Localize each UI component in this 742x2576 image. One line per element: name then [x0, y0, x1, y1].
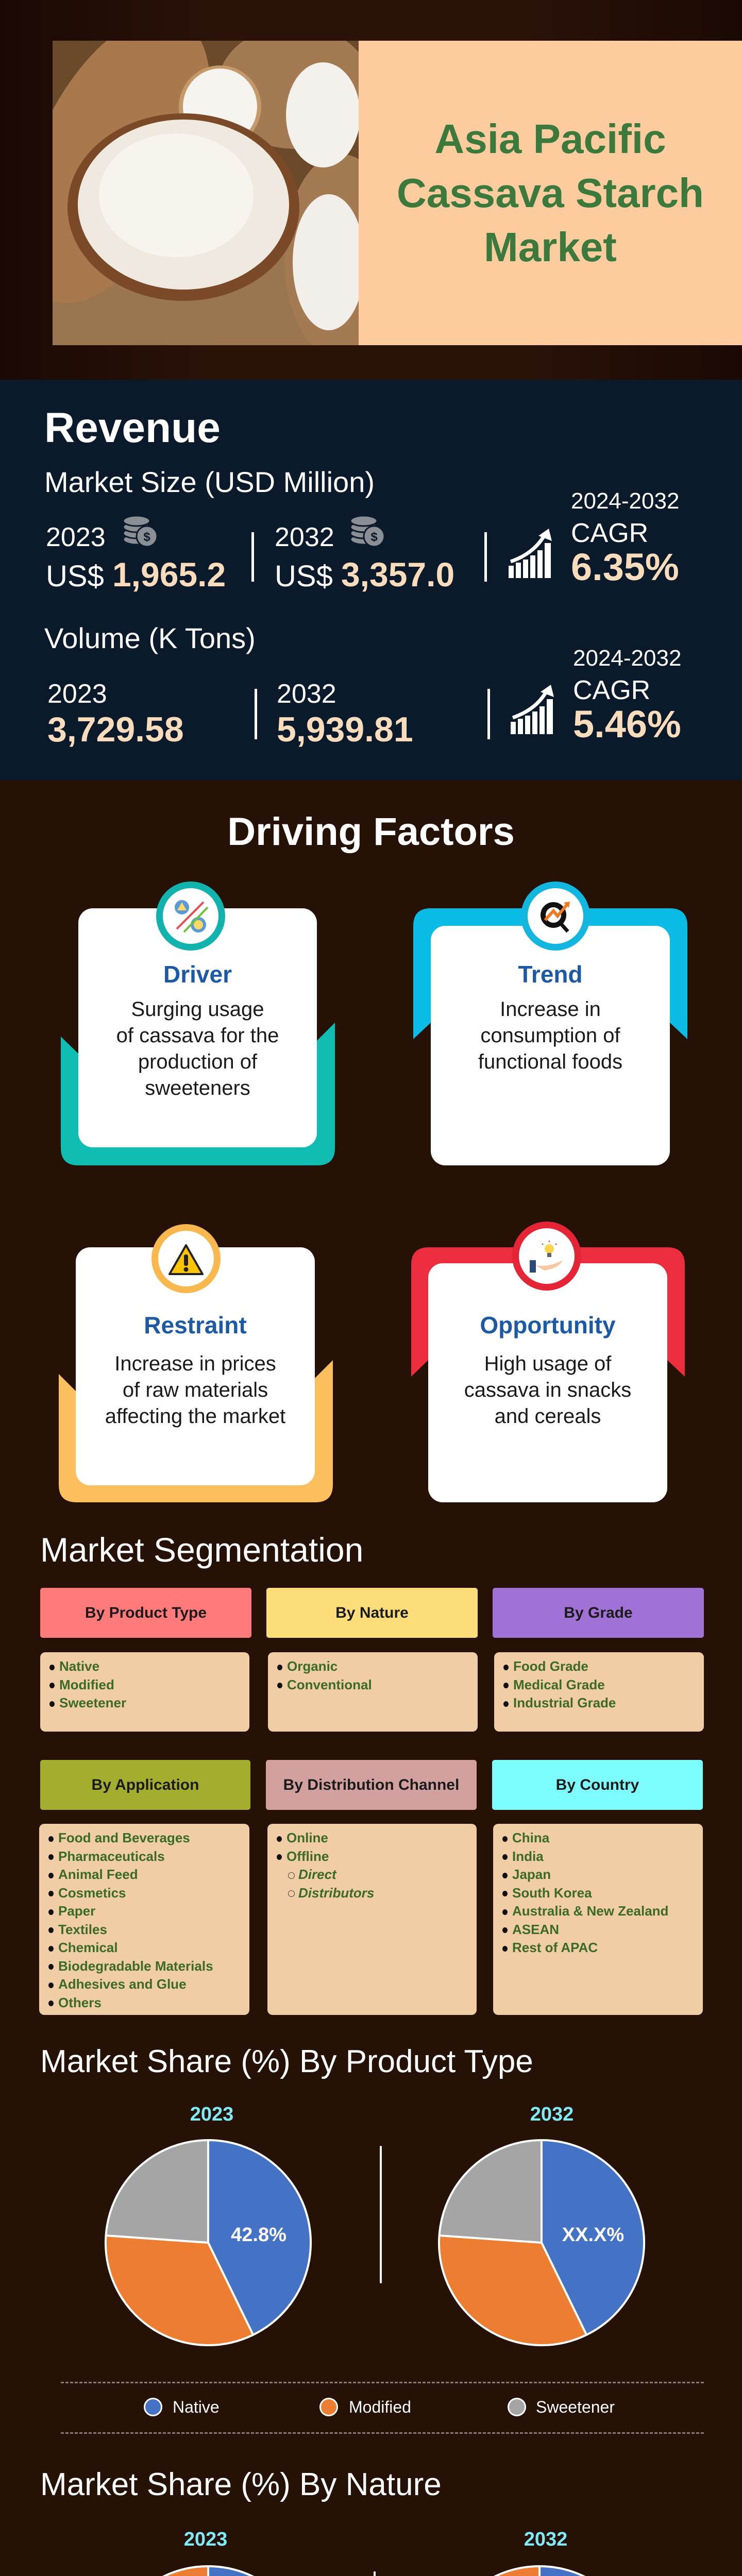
segment: product type: Modified [59, 1676, 114, 1692]
segment: product type: Native [59, 1658, 99, 1674]
stat volume 2032: 5,939.81 [277, 710, 413, 749]
title text [397, 116, 704, 270]
panel: restraint [59, 1224, 333, 1502]
title text: Market [484, 224, 617, 270]
driver title: Driver [163, 961, 232, 988]
segment: distribution channel: Online [286, 1830, 328, 1845]
icon: gears and arrows [175, 900, 208, 933]
stat 2023: US$ 1,965.2 [46, 555, 226, 594]
legend: product type [61, 2382, 704, 2434]
segment: country: By Country [556, 1776, 639, 1793]
subheading market size: Market Size (USD Million) [44, 466, 375, 498]
segment: country: China [512, 1830, 549, 1845]
stat 2032: 2032 [275, 522, 334, 552]
segment: application: Cosmetics [58, 1885, 126, 1900]
cagr volume: 2024-2032 [573, 646, 681, 671]
chart: product type pies: 42.8% [231, 2224, 286, 2246]
heading: revenue: Revenue [44, 404, 221, 451]
driver text [116, 998, 279, 1099]
segment: country: ASEAN [512, 1922, 559, 1937]
trend text: Increase in [500, 998, 601, 1021]
cagr volume: 5.46% [573, 703, 681, 745]
trend title: Trend [518, 961, 583, 988]
legend: product type: Modified [349, 2398, 411, 2416]
stat volume 2032: 2032 [277, 679, 336, 709]
segment: grade: Medical Grade [513, 1676, 605, 1692]
segment: nature: By Nature [335, 1604, 409, 1621]
panel: revenue [0, 380, 742, 780]
chart: product type pies: 2023 [190, 2104, 233, 2125]
heading: market segmentation: Market Segmentation [40, 1531, 363, 1569]
chart: product type pies [105, 2104, 645, 2346]
trend text: functional foods [478, 1050, 622, 1073]
segment: nature: Conventional [287, 1676, 372, 1692]
segment: application: By Application [92, 1776, 199, 1793]
legend: product type: Sweetener [536, 2398, 615, 2416]
segment: grade: Food Grade [513, 1658, 588, 1674]
opportunity text: cassava in snacks [464, 1379, 631, 1401]
chart: product type pies: XX.X% [562, 2224, 624, 2246]
segment: country: Japan [512, 1867, 551, 1882]
segment: grade: By Grade [564, 1604, 633, 1621]
chart: nature pies: 2032 [524, 2529, 567, 2550]
segment: country: Rest of APAC [512, 1940, 598, 1955]
divider [484, 532, 487, 582]
heading: driving factors: Driving Factors [227, 810, 515, 854]
stat 2032: US$ 3,357.0 [275, 555, 454, 594]
icon: hand with bulb [530, 1241, 563, 1273]
title text: Cassava Starch [397, 170, 704, 216]
segment: product type [40, 1588, 251, 1732]
driver text: of cassava for the [116, 1024, 279, 1047]
icon: growth chart [509, 529, 552, 578]
segment: grade: Industrial Grade [513, 1695, 616, 1710]
segment: country [492, 1760, 703, 2015]
stat volume 2023 [47, 679, 184, 749]
segment: application: Animal Feed [58, 1867, 138, 1882]
panel: trend [413, 882, 687, 1165]
driver text: Surging usage [131, 998, 264, 1021]
cagr revenue: CAGR [571, 518, 648, 548]
opportunity text: High usage of [484, 1352, 611, 1375]
trend text: consumption of [480, 1024, 620, 1047]
segment: application: Biodegradable Materials [58, 1958, 213, 1973]
segment: grade [493, 1588, 704, 1732]
segment: distribution channel: By Distribution Channel [283, 1776, 459, 1793]
segment: product type: By Product Type [85, 1604, 207, 1621]
chart: nature pies: 2023 [184, 2529, 227, 2550]
segment: distribution channel: Offline [286, 1849, 329, 1864]
stat volume 2023: 2023 [47, 679, 107, 709]
segment: application [39, 1760, 250, 2015]
segment: application: Chemical [58, 1940, 118, 1955]
segment: application: Paper [58, 1903, 95, 1919]
segment: application: Adhesives and Glue [58, 1976, 187, 1992]
icon: warning [168, 1244, 204, 1275]
cagr revenue: 6.35% [571, 546, 679, 588]
restraint text: affecting the market [105, 1405, 285, 1428]
segment: distribution channel [266, 1760, 477, 2015]
restraint text [105, 1352, 285, 1428]
icon: coins [124, 516, 157, 546]
legend: product type: Native [173, 2398, 220, 2416]
chart: nature pies [162, 2529, 585, 2576]
header background [0, 0, 742, 380]
segment: country: South Korea [512, 1885, 592, 1900]
segment: application: Food and Beverages [58, 1830, 190, 1845]
icon: coins: $ [143, 530, 150, 544]
opportunity text [464, 1352, 631, 1428]
segment: country: India [512, 1849, 544, 1864]
icon: coins [351, 516, 383, 546]
driver text: sweeteners [145, 1077, 250, 1099]
panel: opportunity [411, 1222, 685, 1502]
cagr revenue: 2024-2032 [571, 488, 679, 514]
stat 2032 [275, 516, 454, 594]
cagr revenue [571, 488, 679, 588]
segment: application: Others [58, 1995, 102, 2010]
segment: application: Pharmaceuticals [58, 1849, 165, 1864]
opportunity text: and cereals [495, 1405, 601, 1428]
icon: coins: $ [370, 530, 378, 544]
divider [251, 532, 254, 582]
panel: driver [61, 882, 335, 1165]
heading: market share by product type: Market Share (%) By Product Type [40, 2044, 533, 2079]
segment: application: Textiles [58, 1922, 107, 1937]
hero photo: cassava and starch [53, 41, 359, 345]
opportunity title: Opportunity [480, 1312, 616, 1338]
cagr volume: CAGR [573, 675, 650, 705]
segment: distribution channel: Distributors [298, 1885, 374, 1900]
icon: growth chart [511, 685, 554, 734]
heading: market share by nature: Market Share (%) By Nature [40, 2467, 442, 2502]
divider [487, 689, 490, 739]
title panel [359, 41, 742, 345]
stat 2023 [46, 516, 226, 594]
stat volume 2032 [277, 679, 413, 749]
segment: nature [266, 1588, 478, 1732]
restraint text: Increase in prices [114, 1352, 276, 1375]
restraint text: of raw materials [123, 1379, 268, 1401]
icon: magnifier trend [541, 902, 570, 933]
segment: country: Australia & New Zealand [512, 1903, 668, 1919]
segment: distribution channel: Direct [298, 1867, 336, 1882]
trend text [478, 998, 622, 1073]
chart: product type pies: 2032 [530, 2104, 574, 2125]
stat 2023: 2023 [46, 522, 106, 552]
title text: Asia Pacific [434, 116, 666, 162]
segment: product type: Sweetener [59, 1695, 126, 1710]
divider [255, 689, 257, 739]
cagr volume [573, 646, 681, 745]
restraint title: Restraint [144, 1312, 247, 1338]
segment: nature: Organic [287, 1658, 338, 1674]
subheading volume: Volume (K Tons) [44, 622, 256, 654]
stat volume 2023: 3,729.58 [47, 710, 184, 749]
driver text: production of [138, 1050, 257, 1073]
